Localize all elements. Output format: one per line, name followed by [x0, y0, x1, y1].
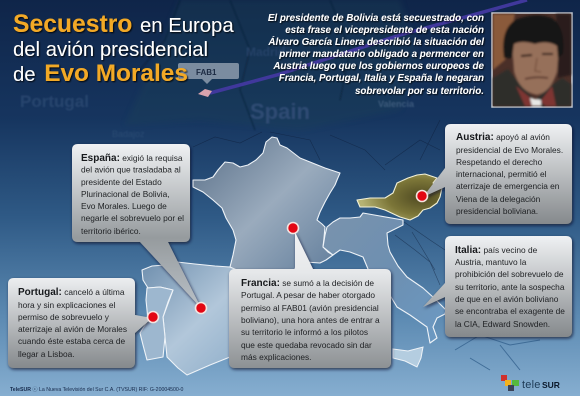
marker: España [196, 302, 206, 314]
intro text: Francia, Portugal, Italia y España le negaran [279, 73, 484, 84]
callout: Francia [229, 232, 391, 368]
map: Portugal [140, 287, 173, 360]
callout: España: Evo Morales. Luego de [81, 201, 167, 211]
background: faded flight map: Portugal [20, 92, 89, 111]
FAB1 flight tag: FAB1 [196, 68, 217, 77]
background: faded flight map: Madrid [246, 45, 285, 59]
callout: Austria: Respetando el derecho [456, 157, 543, 167]
callout: Austria: internacional, permitió el [456, 169, 547, 179]
title [13, 11, 234, 87]
intro text [267, 13, 485, 97]
callout: Italia: su territorio, ante la sospecha [455, 282, 565, 292]
intro text: Austria luego que los gobiernos europeos de [272, 61, 485, 72]
callout: Portugal: permiso de sobrevuelo y [18, 312, 110, 322]
FAB1 flight tag [178, 63, 239, 97]
callout: España: España: exigió la requisa [81, 153, 183, 164]
background: faded flight map: Spain [250, 99, 310, 124]
callout: España: presidente del Estado [81, 177, 162, 187]
callout: Francia: más explicaciones. [241, 352, 312, 362]
callout: España: negarle el sobrevuelo por el [81, 213, 184, 223]
marker: Portugal [148, 312, 158, 322]
background: faded flight map [20, 0, 420, 139]
marker: Francia [288, 222, 298, 234]
callout: Francia: su territorio le informó a los pilotos [241, 327, 368, 337]
callout: Austria [423, 124, 572, 224]
flight route line [210, 0, 527, 93]
callout: Francia: Francia: se sumó a la decisión de [241, 278, 374, 289]
callout: Austria: aterrizaje de emergencia en [456, 181, 560, 191]
photo: Evo Morales portrait [492, 13, 572, 107]
callout: Francia: permiso al FAB01 (avión presidencial [241, 303, 379, 313]
map: Spain [142, 262, 262, 375]
callout: España: territorio ibérico. [81, 226, 141, 236]
logo: teleSUR [501, 375, 560, 391]
callout: Austria: presidencial boliviana. [456, 206, 538, 216]
callout: España [72, 144, 201, 308]
map: Italy [323, 213, 446, 343]
intro text: El presidente de Bolivia está secuestrado, con [268, 13, 484, 24]
logo: teleSUR: tele [522, 379, 541, 391]
callout: Italia [423, 236, 572, 337]
intro text: primer mandatario obligado a permencer en [278, 49, 484, 60]
callout: Portugal: aterrizaje al avión de Morales [18, 324, 127, 334]
callout: Portugal: hora y sin explicaciones el [18, 300, 116, 310]
callout: Italia: Austria, mantuvo la [455, 257, 527, 267]
callout: España: Plurinacional de Bolivia, [81, 189, 170, 199]
callout: Italia: la CIA, Edward Snowden. [455, 319, 550, 329]
callout: Portugal: llegar a Lisboa. [18, 349, 75, 359]
title: de Evo Morales [13, 60, 188, 87]
callout: Italia: de que en el avión boliviano [455, 294, 559, 304]
callout: Portugal [8, 278, 152, 368]
callout: Italia: Italia: país vecino de [455, 245, 538, 256]
callout: Austria: presidencial de Evo Morales. [456, 145, 563, 155]
callout: Austria: Viena de la delegación [456, 194, 541, 204]
footer credit: TeleSUR ⓒ La Nueva Televisión del Sur C.A. (TVSUR) RIF: G-20004500-0 [10, 385, 183, 393]
title: del avión presidencial [13, 39, 208, 61]
callout: Portugal: cuando éste estaba cerca de [18, 336, 126, 346]
callout: España: del avión que trasladaba al [81, 164, 181, 174]
callout: Francia: que este quedaba revocado sin dar [241, 340, 372, 350]
callout: Austria: Austria: apoyó al avión [456, 132, 550, 143]
dark neighbouring borders [193, 120, 445, 285]
map: Sicily [393, 347, 423, 367]
title: Secuestro en Europa [13, 11, 234, 38]
callout: Italia: prohibición del sobrevuelo de [455, 269, 564, 279]
intro text: Álvaro García Linera describió la situación del [267, 37, 484, 48]
callout: Francia: boliviano), una hora antes de entrar a [241, 315, 380, 325]
intro text: esta frase el vicepresidente de esta nación [285, 25, 484, 36]
callout: Portugal: Portugal: canceló a última [18, 287, 125, 298]
marker: Austria [416, 190, 428, 202]
logo: teleSUR: SUR [542, 380, 560, 390]
map: France [193, 137, 340, 280]
map: Austria [357, 174, 442, 220]
background: faded flight map: Valencia [378, 99, 415, 109]
callout: Italia: se encontraba el exagente de [455, 306, 565, 316]
intro text: sobrevolar por su territorio. [355, 86, 484, 97]
callout: Francia: Portugal. A pesar de haber otorgado [241, 290, 375, 300]
background: faded flight map: Badajoz [112, 129, 145, 139]
